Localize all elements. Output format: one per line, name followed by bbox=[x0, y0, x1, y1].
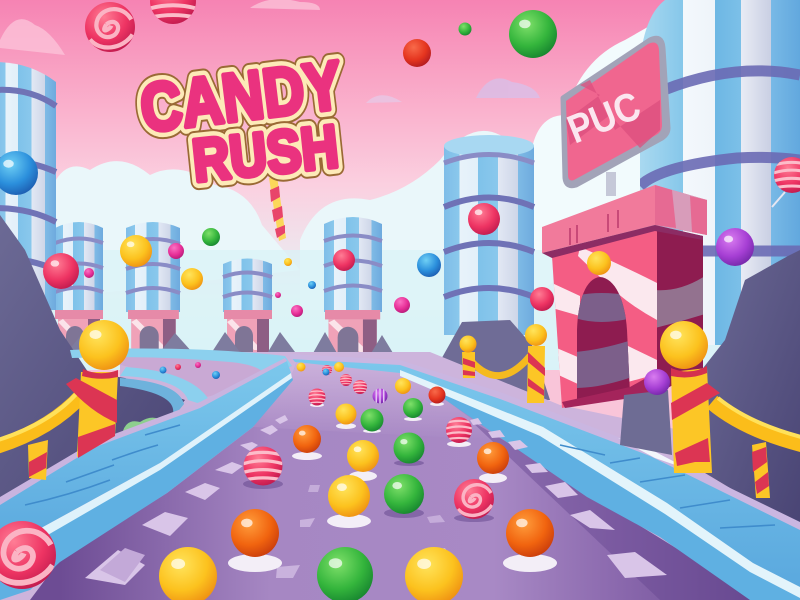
ball shadows bbox=[243, 460, 494, 522]
dashed road markings bbox=[85, 415, 667, 585]
rock: left cliff bbox=[0, 215, 185, 510]
title line: RUSH: RUSH bbox=[189, 113, 341, 194]
ball base discs bbox=[228, 402, 557, 572]
low pale horizon bbox=[0, 250, 560, 360]
mid tower bbox=[444, 135, 534, 335]
far small rocks bbox=[65, 330, 396, 358]
candy balls on the road bbox=[0, 362, 554, 600]
title lollipop stick bbox=[269, 176, 286, 241]
left curb bbox=[0, 358, 293, 600]
title line: CANDY: CANDY bbox=[136, 47, 346, 147]
far tower 3 bbox=[223, 258, 272, 355]
arch front face bbox=[550, 225, 660, 410]
title line: RUSH: RUSH bbox=[189, 113, 341, 194]
big right tower bbox=[640, 0, 800, 345]
far tower 2 bbox=[126, 222, 180, 355]
right big barrier post bbox=[644, 321, 800, 498]
title line: CANDY: CANDY bbox=[136, 47, 346, 147]
sign text: PUC bbox=[562, 84, 647, 152]
arch side face bbox=[657, 231, 703, 388]
road far haze bbox=[253, 358, 500, 440]
grey box by right post bbox=[620, 390, 672, 455]
main road bbox=[30, 358, 760, 600]
title line: RUSH: RUSH bbox=[189, 113, 341, 194]
title bbox=[136, 47, 346, 194]
title line: CANDY: CANDY bbox=[136, 47, 346, 147]
right curb bbox=[290, 354, 800, 600]
arch base shadow bbox=[562, 372, 657, 408]
rock: right cliff bbox=[700, 250, 800, 530]
far tower 4 bbox=[324, 217, 382, 357]
road edge shading right bbox=[470, 420, 760, 600]
PUC sign bbox=[562, 38, 668, 186]
floating candy balls in the sky bbox=[0, 0, 800, 317]
rock: behind gate bbox=[434, 320, 550, 400]
arch top cap bbox=[542, 185, 707, 253]
far tower 1 bbox=[55, 222, 103, 355]
left tall tower bbox=[0, 62, 56, 310]
curved back track bbox=[70, 348, 292, 424]
sky background bbox=[0, 0, 800, 370]
white clouds behind the towers bbox=[40, 20, 660, 310]
left big barrier post bbox=[0, 320, 129, 480]
bushes under left track bbox=[122, 418, 168, 442]
pink candy arch gate bbox=[542, 185, 707, 410]
small gate posts with rope bbox=[460, 324, 547, 403]
sign pole bbox=[606, 172, 616, 196]
pale clouds in the sky bbox=[0, 0, 540, 103]
arch opening bbox=[577, 277, 630, 399]
lilac ground bbox=[0, 352, 800, 600]
